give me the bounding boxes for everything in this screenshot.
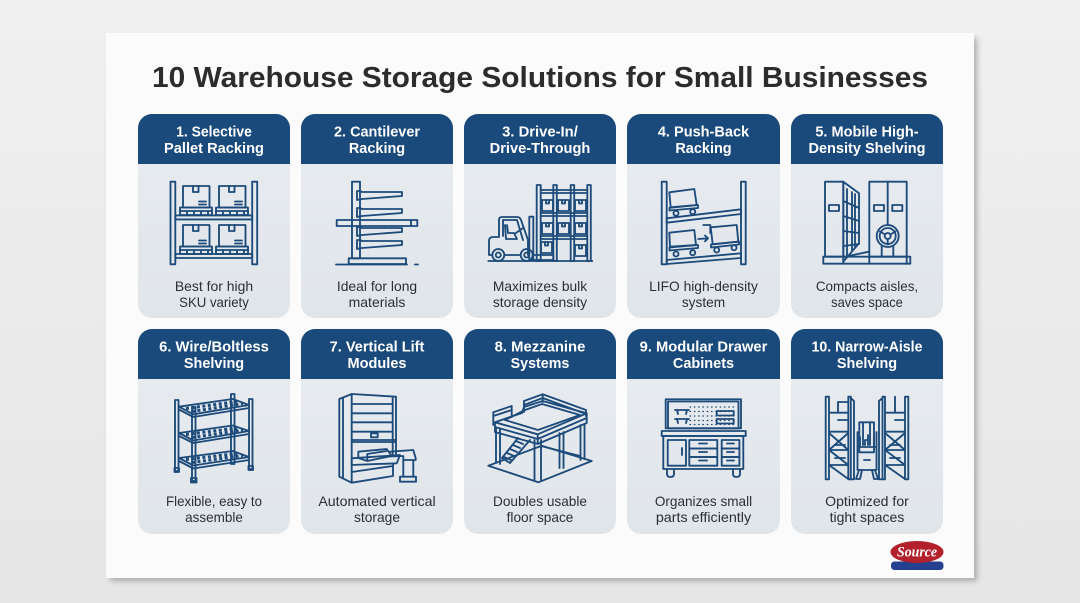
panel: 6 wire boltless shelving: Shelving [184,355,244,372]
panel: 9 modular drawer cabinets: parts efficiently [656,509,751,525]
panel: 3 drive-in drive-through [464,114,616,318]
panel: 4 push-back racking: Racking [675,140,732,157]
panel: 7 vertical lift modules [301,329,453,534]
panel: 5 mobile high-density shelving [791,114,943,318]
panel: 7 vertical lift modules: storage [354,509,400,525]
panel: 6 wire boltless shelving: 6. Wire/Boltless [159,339,269,356]
panel: 4 push-back racking: LIFO high-density [649,278,758,294]
panel: 1 selective pallet racking: SKU variety [179,294,249,310]
panel: 2 cantilever racking: materials [349,294,405,310]
panel: 8 mezzanine systems [464,329,616,534]
panel: 3 drive-in drive-through: Drive-Through [490,140,590,157]
panel: 6 wire boltless shelving [138,329,290,534]
panel: 5 mobile high-density shelving: Compacts aisles, [816,278,918,294]
panel: 9 modular drawer cabinets: Cabinets [673,355,734,372]
panel: 3 drive-in drive-through: Maximizes bulk [493,278,588,294]
panel: 3 drive-in drive-through: 3. Drive-In/ [502,124,579,141]
panel: 3 drive-in drive-through: storage density [493,294,587,310]
panel: 9 modular drawer cabinets: 9. Modular Drawer [640,339,767,356]
panel: 1 selective pallet racking: 1. Selective [176,124,252,141]
panel: 7 vertical lift modules: 7. Vertical Lift [330,339,424,356]
panel: 4 push-back racking: system [682,294,725,310]
panel: 8 mezzanine systems: 8. Mezzanine [495,339,585,356]
logo: Source [890,541,944,570]
panel: 2 cantilever racking: Ideal for long [337,278,417,294]
panel: 8 mezzanine systems: Systems [511,355,569,372]
panel: 4 push-back racking [627,114,780,318]
panel: 10 narrow-aisle shelving: tight spaces [830,509,904,525]
panel: 4 push-back racking: 4. Push-Back [658,124,750,141]
panel: 5 mobile high-density shelving: 5. Mobile High- [815,124,919,141]
panel: 10 narrow-aisle shelving: Shelving [837,355,897,372]
paper shadow [110,38,977,581]
panel: 8 mezzanine systems: Doubles usable [493,493,587,509]
panel: 6 wire boltless shelving: assemble [185,509,243,525]
title: 10 Warehouse Storage Solutions for Small Businesses [152,62,928,94]
panel: 9 modular drawer cabinets [627,329,780,534]
panel: 1 selective pallet racking: Best for high [175,278,253,294]
panel: 1 selective pallet racking [138,114,290,318]
panel: 5 mobile high-density shelving: Density Shelving [808,140,926,157]
panel: 1 selective pallet racking: Pallet Racking [164,140,264,157]
panel: 2 cantilever racking: Racking [349,140,405,157]
panel: 7 vertical lift modules: Automated vertical [318,493,436,509]
panel: 9 modular drawer cabinets: Organizes small [655,493,752,509]
panel: 5 mobile high-density shelving: saves space [831,294,903,310]
panel: 10 narrow-aisle shelving: 10. Narrow-Aisle [812,339,922,356]
paper sheet [106,33,974,578]
panel: 8 mezzanine systems: floor space [507,509,574,525]
panel: 10 narrow-aisle shelving: Optimized for [825,493,909,509]
panel: 2 cantilever racking [301,114,453,318]
panel: 10 narrow-aisle shelving [791,329,943,534]
logo: Source: Source [897,544,938,560]
panel: 2 cantilever racking: 2. Cantilever [334,124,420,141]
panel: 7 vertical lift modules: Modules [348,355,406,372]
panel: 6 wire boltless shelving: Flexible, easy to [166,493,262,509]
